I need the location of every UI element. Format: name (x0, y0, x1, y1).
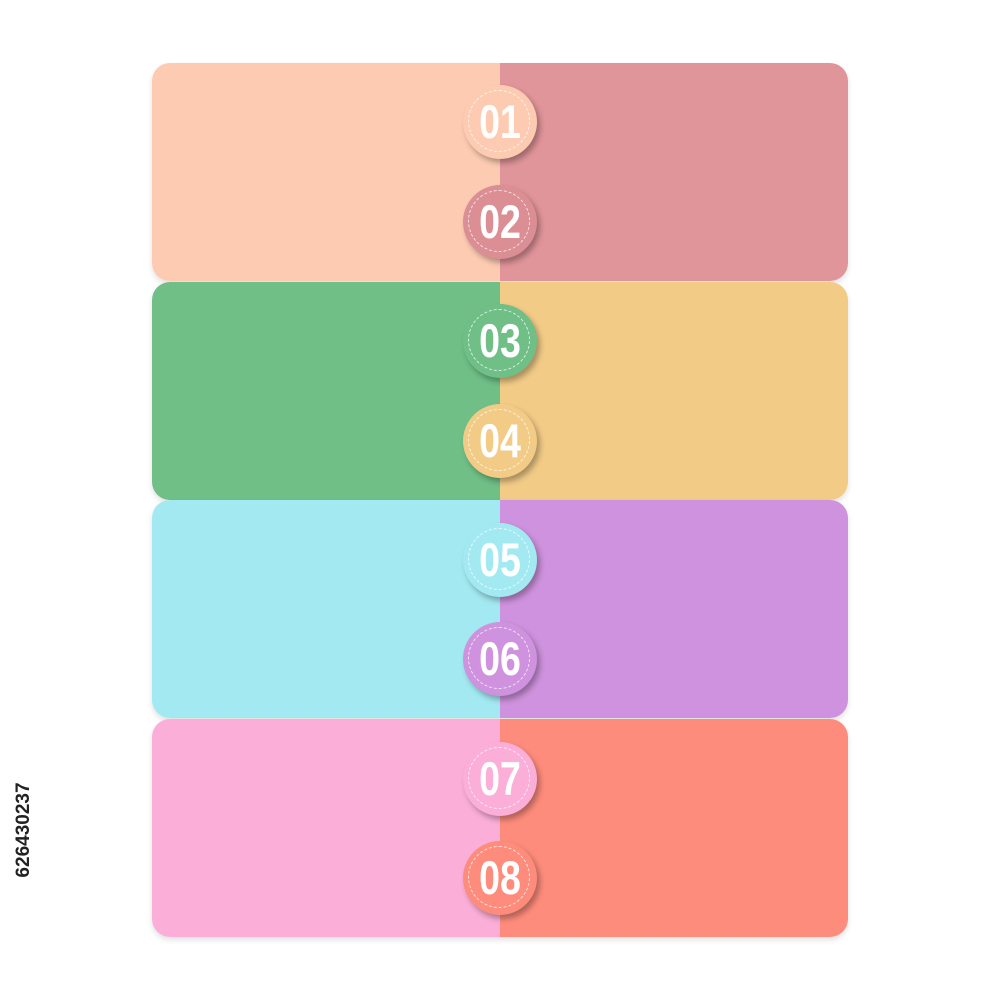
badge 06: 06 (479, 632, 521, 685)
panel: row 3 (152, 500, 848, 718)
badge 03: 03 (479, 314, 521, 367)
badge 05 (463, 523, 537, 597)
badge 04 (463, 404, 537, 478)
badge 06 (463, 622, 537, 696)
badge 07 (463, 742, 537, 816)
panel: row 1 (152, 63, 848, 281)
panel: row 2 (152, 282, 848, 500)
panel: row 4 (152, 719, 848, 937)
badge 03 (463, 304, 537, 378)
stock id text: 626430237 (13, 782, 34, 878)
badge 05: 05 (479, 533, 521, 586)
badge 02 (463, 185, 537, 259)
badge 04: 04 (479, 414, 521, 467)
badge 07: 07 (479, 752, 521, 805)
badge 01: 01 (479, 95, 521, 148)
badge 02: 02 (479, 195, 521, 248)
badge 08: 08 (479, 851, 521, 904)
badge 01 (463, 85, 537, 159)
badge 08 (463, 841, 537, 915)
